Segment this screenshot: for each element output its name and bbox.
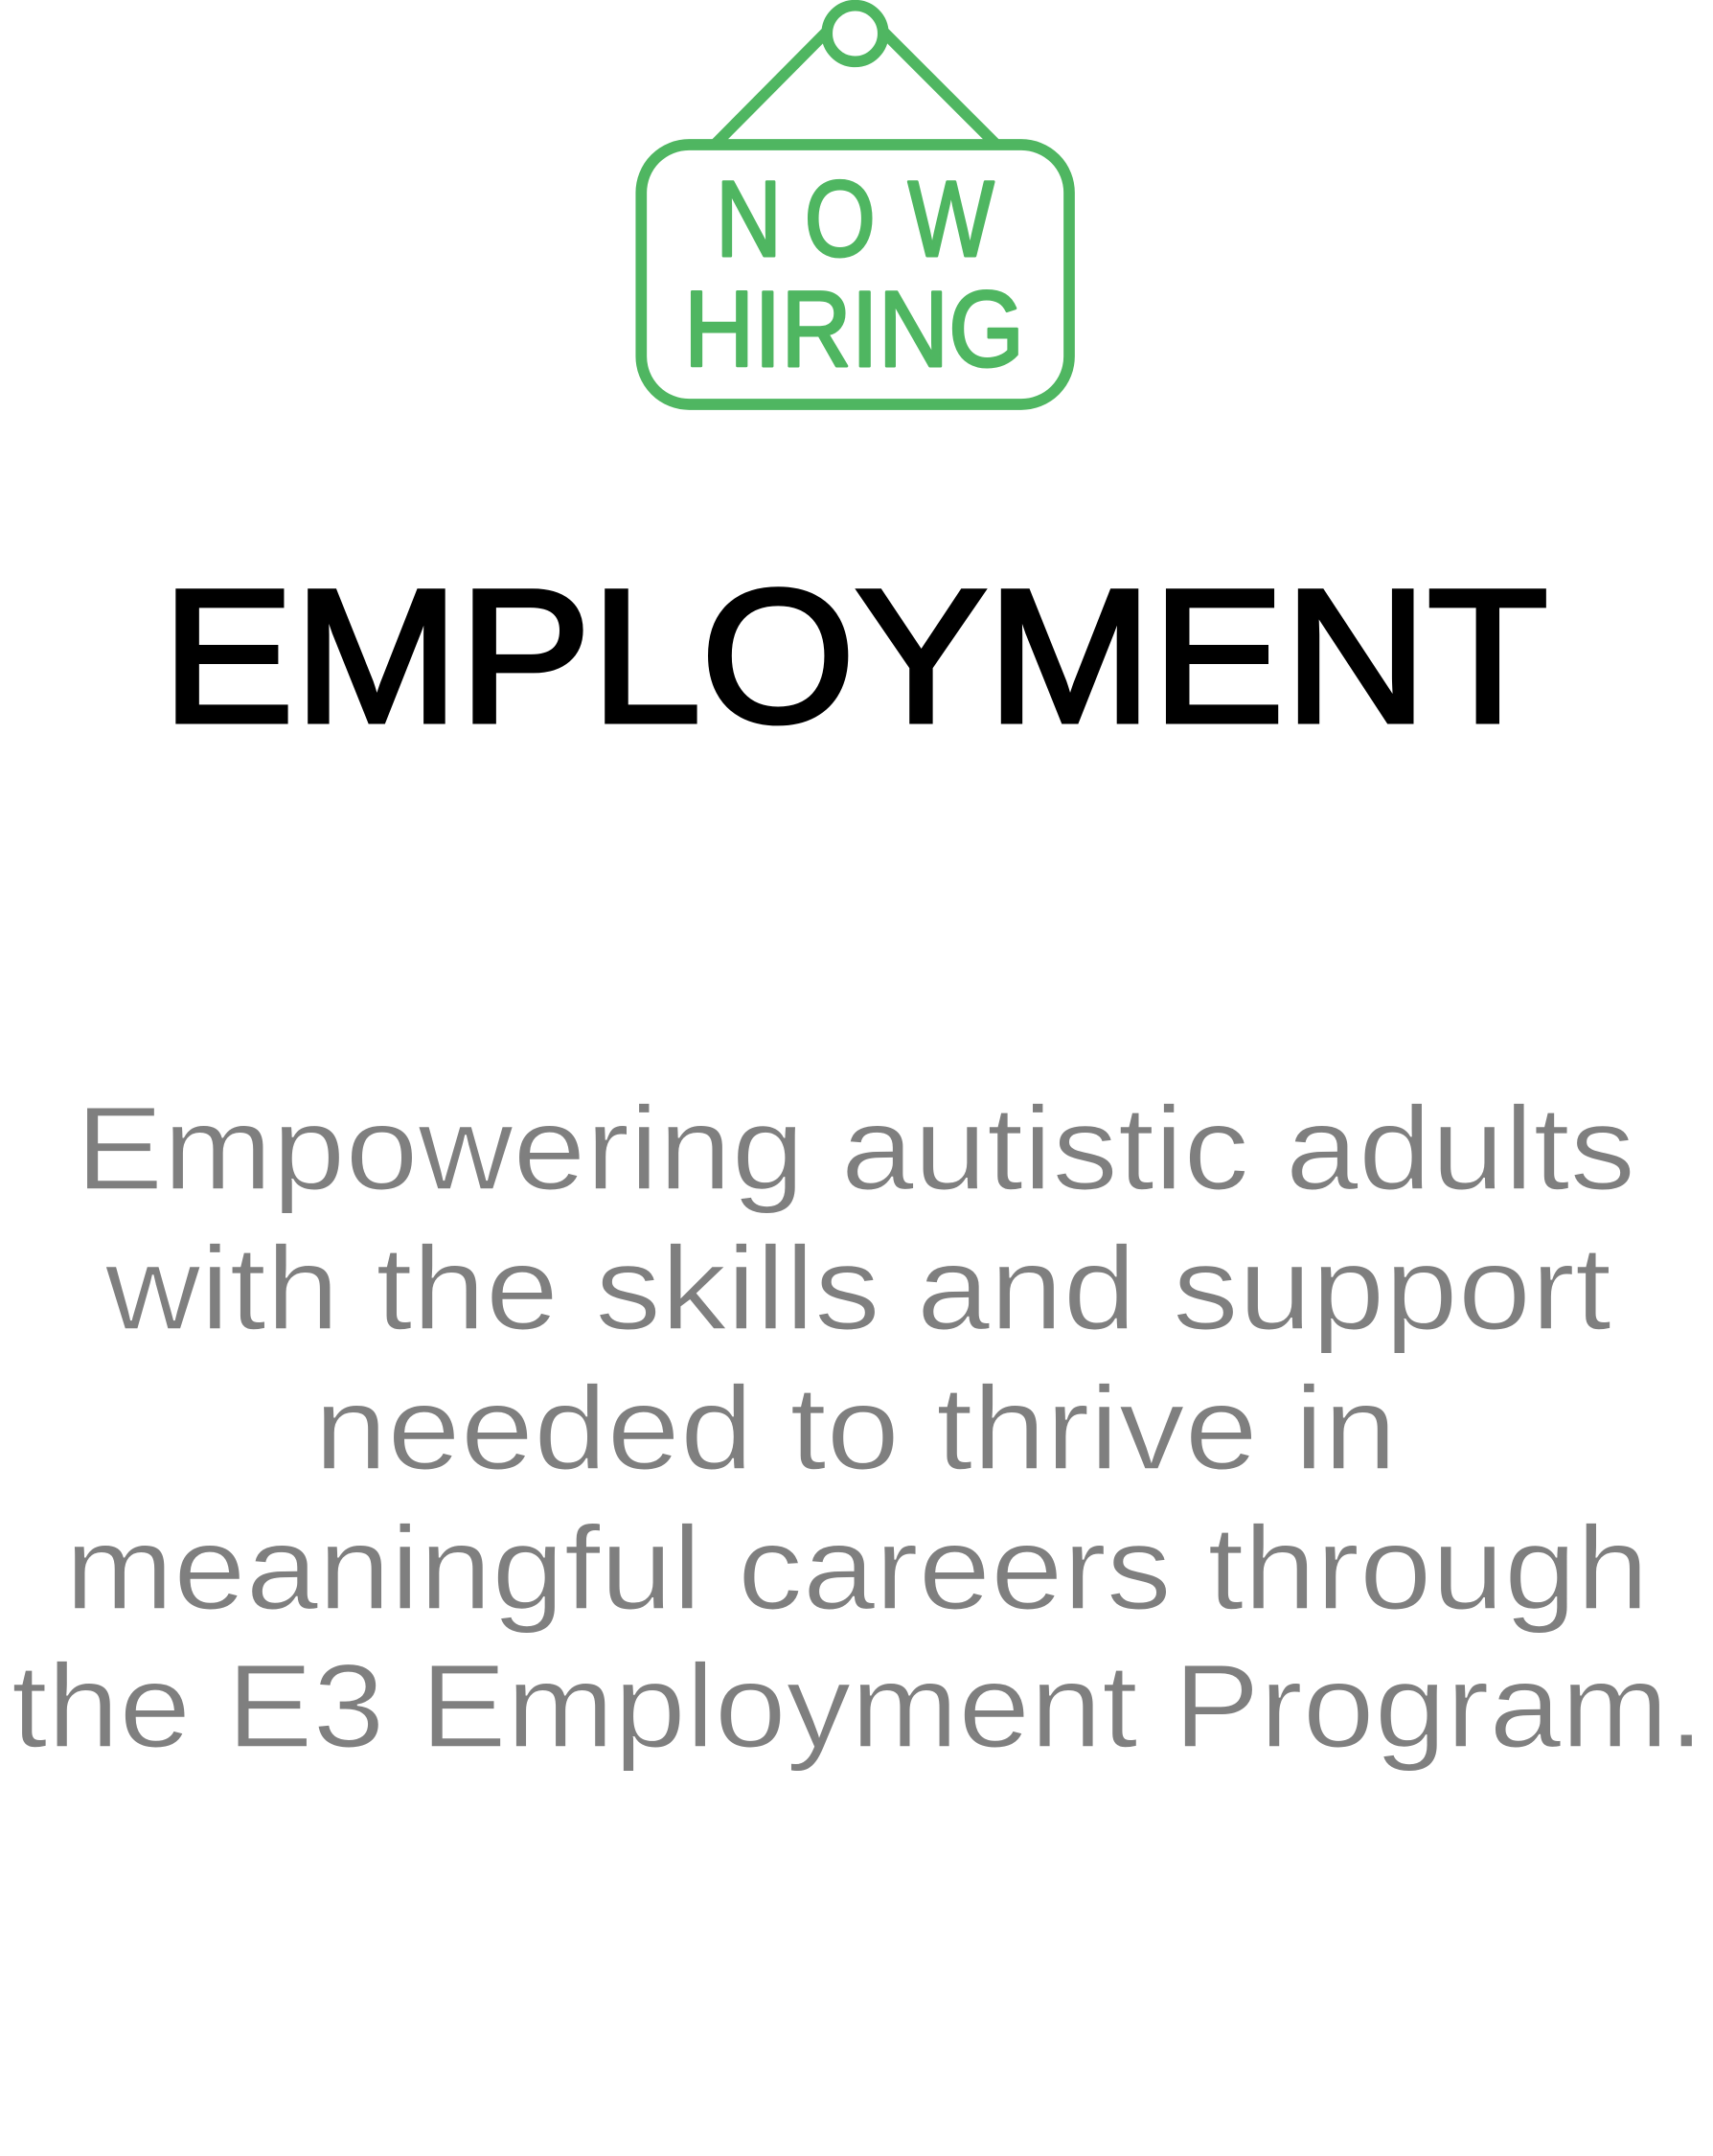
description line 4: meaningful careers through [65, 1502, 1649, 1635]
icon: hanging strings [714, 33, 997, 146]
icon: sign outline [641, 145, 1069, 404]
description line 5: the E3 Employment Program. [11, 1640, 1704, 1773]
icon: hanging pin [827, 6, 883, 61]
title: EMPLOYMENT [162, 550, 1548, 762]
icon: now hiring sign [641, 6, 1069, 404]
description line 1: Empowering autistic adults [76, 1083, 1635, 1215]
sign text: HIRING: HIRING [684, 269, 1024, 389]
sign text: NOW: NOW [716, 160, 994, 280]
description text block [11, 1083, 1704, 1773]
description line 3: needed to thrive in [314, 1363, 1397, 1495]
description line 2: with the skills and support [104, 1223, 1611, 1355]
